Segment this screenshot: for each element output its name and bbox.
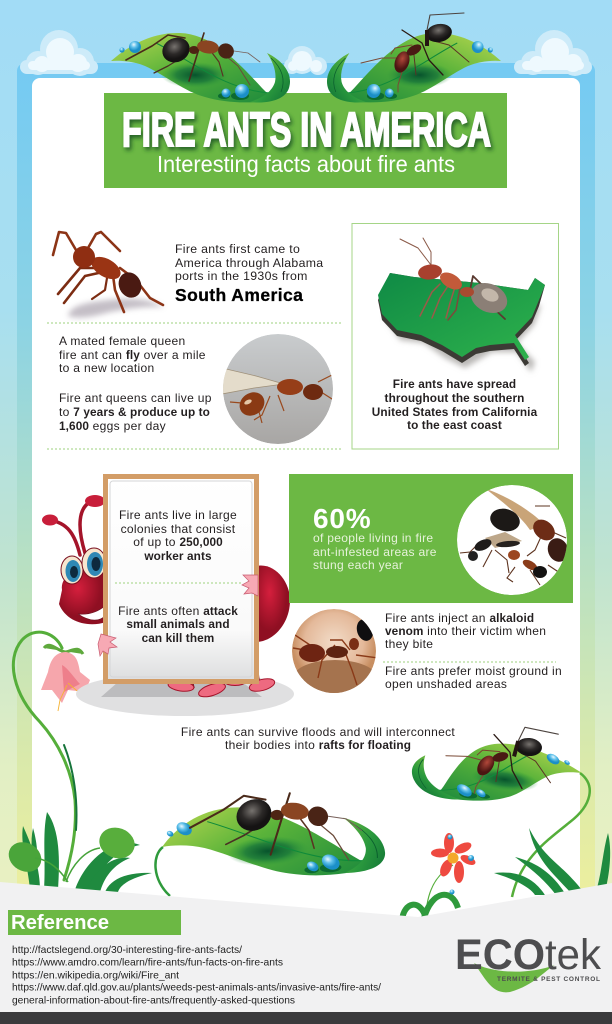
sign text: colonies: of up to 250,000 <box>133 535 223 549</box>
sign text: colonies: worker ants <box>143 549 212 563</box>
white content panel <box>32 78 580 928</box>
cloud: centre <box>284 46 327 75</box>
stem: lower leaves <box>155 847 170 896</box>
stat caption: of people living in fire <box>313 531 433 545</box>
hands <box>242 575 258 596</box>
text: queen facts: to a new location <box>59 361 155 375</box>
panel: map of spread <box>352 224 558 449</box>
leaf with ant: lower right <box>395 707 598 812</box>
sign text: colonies: colonies that consist <box>121 522 236 536</box>
sign text: attack: can kill them <box>142 631 214 645</box>
footer bar <box>0 1012 612 1024</box>
map caption: Fire ants have spread <box>393 377 516 391</box>
reference links: https://www.amdro.com/learn/fire-ants/fun-facts-on-fire-ants <box>12 958 283 968</box>
footer panel <box>0 882 612 1024</box>
leaf with ant: top left <box>111 33 290 102</box>
reference links: http://factslegend.org/30-interesting-fire-ants-facts/ <box>12 945 242 956</box>
text: moist ground: Fire ants prefer moist ground in <box>385 664 562 678</box>
photo: three ants <box>457 485 572 595</box>
round leaf <box>95 823 139 863</box>
panel: 60% stat <box>289 474 573 603</box>
photo: winged queen ant <box>222 334 333 444</box>
text: alkaloid venom: venom into their victim when <box>385 624 546 638</box>
blue frame <box>17 63 595 928</box>
reference links <box>12 945 381 1006</box>
text: floods <box>181 725 455 752</box>
cloud: right <box>514 30 592 76</box>
map caption <box>372 377 538 432</box>
logo: ECOtek: ECO <box>455 931 545 979</box>
text: moist ground: open unshaded areas <box>385 677 507 691</box>
antennae <box>48 500 95 555</box>
text: ants came from South America: ports in the 1930s from <box>175 269 308 283</box>
body <box>256 565 290 642</box>
stat caption: ant-infested areas are <box>313 545 437 559</box>
icon: red ant with shadow <box>53 232 164 318</box>
pink bell flower <box>41 645 90 711</box>
text: floods: their bodies into rafts for floating <box>225 738 411 752</box>
eyes <box>61 556 83 584</box>
logo: ECOtek <box>455 931 601 992</box>
title banner <box>104 93 507 188</box>
photo: ant on ground <box>292 609 378 696</box>
sign text: attack: Fire ants often attack <box>118 604 238 618</box>
reference links: https://www.daf.qld.gov.au/plants/weeds-pest-animals-ants/invasive-ants/fire-ants/ <box>12 982 381 994</box>
text: queen facts: Fire ant queens can live up <box>59 391 212 405</box>
text: queen facts: to 7 years & produce up to <box>59 405 210 419</box>
round leaf <box>3 836 47 878</box>
leaf with ant: top right <box>327 13 501 102</box>
text: alkaloid venom <box>385 611 546 651</box>
text: floods: Fire ants can survive floods and will interconnect <box>181 725 455 739</box>
ant on map <box>400 238 512 320</box>
head <box>59 569 106 624</box>
reference links: https://en.wikipedia.org/wiki/Fire_ant <box>12 970 179 982</box>
feet <box>167 676 276 700</box>
logo: ECOtek: tek <box>545 931 601 979</box>
sign text: attack: small animals and <box>126 617 230 631</box>
map caption: to the east coast <box>407 418 502 432</box>
reference heading <box>8 910 181 935</box>
logo: ECOtek: TERMITE & PEST CONTROL <box>497 976 600 983</box>
text: moist ground <box>385 664 562 691</box>
stat caption: stung each year <box>313 558 403 572</box>
stat caption <box>313 531 437 572</box>
text: queen facts: fire ant can fly over a mile <box>59 348 206 362</box>
map caption: throughout the southern <box>385 391 524 405</box>
reference links: general-information-about-fire-ants/frequently-asked-questions <box>12 996 295 1006</box>
sign text: colonies: Fire ants live in large <box>119 508 237 522</box>
leaf with ant: lower centre <box>149 793 393 892</box>
sign text: colonies <box>119 508 237 563</box>
plants: right grass <box>494 828 610 895</box>
text: queen facts <box>59 334 212 433</box>
flower stem: left <box>13 632 76 880</box>
map caption: United States from California <box>372 405 538 419</box>
text: ants came from South America: South America <box>175 285 303 305</box>
stat number: 60% <box>313 503 371 534</box>
text: ants came from South America: America through Alabama <box>175 256 323 270</box>
shadow under sign <box>76 672 294 716</box>
text: ants came from South America: Fire ants first came to <box>175 242 300 256</box>
subtitle: Interesting facts about fire ants <box>157 151 455 177</box>
sign text: attack <box>118 604 238 645</box>
red flower <box>402 833 477 920</box>
cartoon ant behind sign <box>42 476 294 716</box>
sign board <box>106 476 256 682</box>
reference heading: Reference <box>11 912 109 934</box>
text: queen facts: 1,600 eggs per day <box>59 419 166 433</box>
text: queen facts: A mated female queen <box>59 334 186 348</box>
map of United States <box>378 273 545 372</box>
cloud: left <box>20 30 98 76</box>
plants: left grass <box>3 812 152 892</box>
text: ants came from South America <box>175 242 323 305</box>
text: alkaloid venom: they bite <box>385 637 433 651</box>
text: alkaloid venom: Fire ants inject an alkaloid <box>385 611 534 625</box>
